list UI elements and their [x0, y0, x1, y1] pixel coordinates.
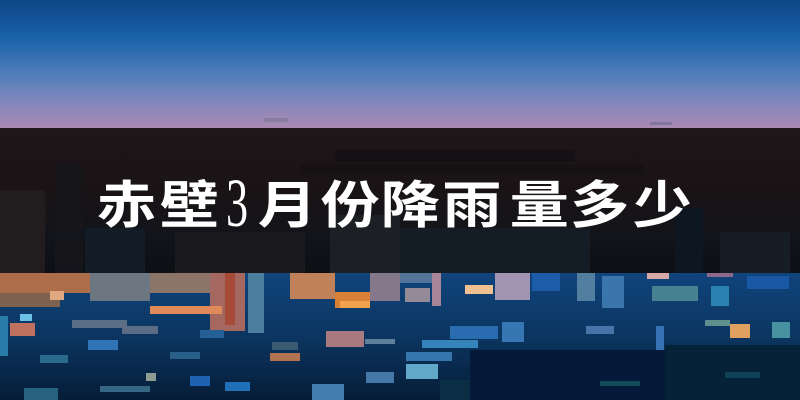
title: 壁: [160, 177, 219, 234]
title: 多: [570, 177, 629, 234]
title: [97, 167, 692, 241]
title: 量: [510, 177, 569, 234]
title: 少: [633, 177, 692, 234]
title: 3: [226, 167, 248, 241]
title: 份: [320, 177, 380, 234]
title: 降: [381, 177, 440, 234]
dark title band with faint skyline: [0, 128, 800, 273]
title: 月: [258, 177, 317, 234]
city lights mosaic: [0, 273, 800, 400]
sky background: [0, 0, 800, 128]
title: 雨: [442, 177, 502, 234]
title: 赤: [97, 177, 156, 234]
